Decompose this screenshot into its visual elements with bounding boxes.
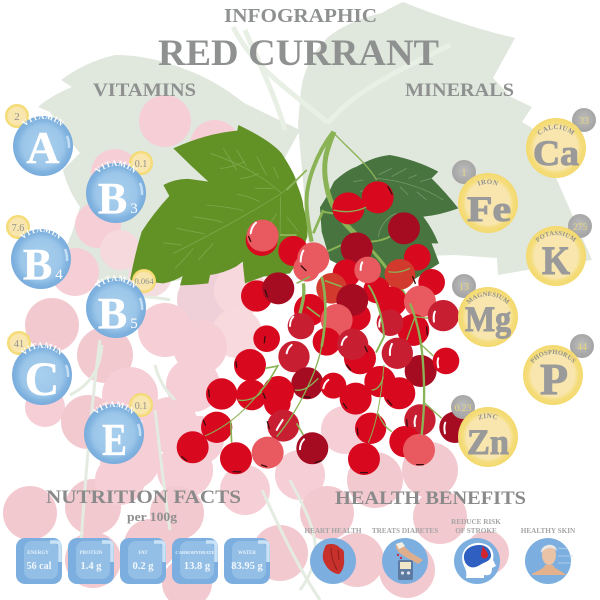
vitamin B3: VITAMIN: [94, 160, 138, 173]
heading: nutrition facts: NUTRITION FACTS: [46, 488, 241, 508]
amount badge: 7.6: [12, 223, 24, 234]
vitamin B3: 3: [130, 201, 138, 217]
label: heart health: HEART HEALTH: [304, 527, 362, 535]
mineral Mg: MAGNESIUM: [466, 292, 510, 304]
mineral Zn: ZINC: [478, 413, 498, 420]
vitamin B3: B: [98, 174, 127, 223]
tile: fat: [120, 538, 166, 584]
leaf: bright green: [130, 125, 307, 285]
amount badge: 13: [459, 282, 469, 293]
mineral Fe: [452, 160, 518, 233]
stems over berries: [205, 207, 442, 443]
icon: heart: [310, 538, 356, 584]
icon: brain stroke: [454, 538, 500, 584]
icon: healthy skin face: [525, 538, 573, 584]
tile: water: WATER: [238, 551, 256, 556]
tile: carbohydrate: [172, 538, 218, 584]
vitamin C: C: [25, 353, 59, 406]
mineral P: [523, 334, 594, 405]
amount badge: 0.1: [135, 159, 147, 170]
heading: minerals: MINERALS: [405, 80, 514, 101]
tile: carbohydrate: CARBOHYDRATE: [175, 550, 215, 555]
vitamin B3: [86, 151, 153, 223]
vitamin B4: 4: [55, 267, 63, 283]
mineral Mg: [452, 274, 518, 347]
vitamin B4: [6, 215, 71, 289]
tile: energy: ENERGY: [27, 551, 49, 556]
benefit labels: [304, 518, 576, 535]
amount badge: 44: [577, 342, 587, 353]
tile: energy: [16, 538, 62, 584]
tile: carbohydrate: 13.8 g: [184, 561, 211, 572]
vitamin E: VITAMIN: [92, 401, 136, 414]
vitamin E: E: [102, 414, 127, 465]
mineral Fe: IRON: [477, 179, 498, 186]
amount badge: 33: [579, 116, 589, 127]
vitamin B5: 5: [130, 316, 138, 332]
vitamin E: [84, 393, 153, 465]
tile: protein: 1.4 g: [80, 561, 102, 572]
label: reduce risk of stroke: REDUCE RISK: [451, 518, 501, 526]
tile: water: [224, 538, 270, 584]
tile: fat: 0.2 g: [132, 561, 154, 572]
amount badge: 0.23: [455, 404, 472, 414]
background: pale berry stems and highlights: [70, 290, 320, 600]
label: reduce risk of stroke: OF STROKE: [455, 527, 497, 535]
background: pink berries: [3, 95, 509, 600]
vitamin B4: VITAMIN: [19, 228, 60, 239]
tile: fat: FAT: [138, 551, 148, 556]
mineral Ca: [526, 108, 596, 178]
berry calyx ticks: [182, 187, 427, 473]
tile: protein: [68, 538, 114, 584]
heading: health benefits: HEALTH BENEFITS: [335, 489, 526, 509]
tile: water: 83.95 g: [231, 561, 264, 572]
title: infographic: INFOGRAPHIC: [224, 6, 377, 27]
amount badge: 275: [573, 223, 587, 233]
vitamin C: VITAMIN: [20, 342, 62, 355]
berry highlights: [251, 223, 445, 449]
mineral Fe: Fe: [467, 189, 511, 229]
background: pale leaves: [38, 2, 592, 290]
icon: diabetes meter: [382, 538, 428, 584]
heading: vitamins: VITAMINS: [93, 80, 196, 101]
subheading: per 100g: per 100g: [127, 510, 178, 524]
vitamin B5: B: [98, 289, 127, 338]
tile: protein: PROTEIN: [80, 551, 103, 556]
mineral K: POTASSIUM: [535, 230, 576, 242]
vitamin A: A: [26, 122, 60, 173]
leaf: dark green: [320, 155, 458, 287]
title group: [158, 6, 439, 74]
mineral K: K: [542, 238, 570, 283]
mineral Ca: CALCIUM: [538, 124, 575, 135]
mineral Zn: [451, 395, 518, 467]
vitamin B5: [86, 269, 156, 338]
leaf veins: [163, 148, 307, 268]
vitamin C: [7, 331, 72, 406]
vitamin B5: VITAMIN: [94, 276, 138, 288]
amount badge: 2: [14, 111, 20, 123]
amount badge: 41: [14, 339, 24, 350]
vitamin A: [5, 104, 73, 176]
amount badge: 0.1: [135, 401, 147, 412]
mineral Ca: Ca: [533, 133, 579, 173]
label: treats diabetes: TREATS DIABETES: [372, 527, 438, 535]
background: pale stems: [233, 27, 450, 130]
red currant illustration: [130, 125, 471, 475]
stems behind berries: [280, 132, 410, 303]
title: red currant: RED CURRANT: [158, 33, 439, 74]
amount badge: 0.064: [134, 276, 154, 286]
nutrition tiles: [16, 538, 270, 584]
mineral K: [526, 214, 592, 286]
tile: energy: 56 cal: [27, 561, 52, 572]
mineral Zn: Zn: [467, 422, 509, 462]
berries: [177, 181, 471, 475]
dark leaf veins: [353, 168, 443, 237]
mineral Mg: Mg: [465, 299, 511, 339]
label: healthy skin: HEALTHY SKIN: [521, 527, 576, 535]
mineral P: PHOSPHORUS: [530, 350, 576, 364]
vitamin B4: B: [23, 240, 52, 289]
vitamin A: VITAMIN: [21, 114, 64, 126]
mineral P: P: [540, 355, 568, 404]
amount badge: 1: [462, 168, 466, 179]
